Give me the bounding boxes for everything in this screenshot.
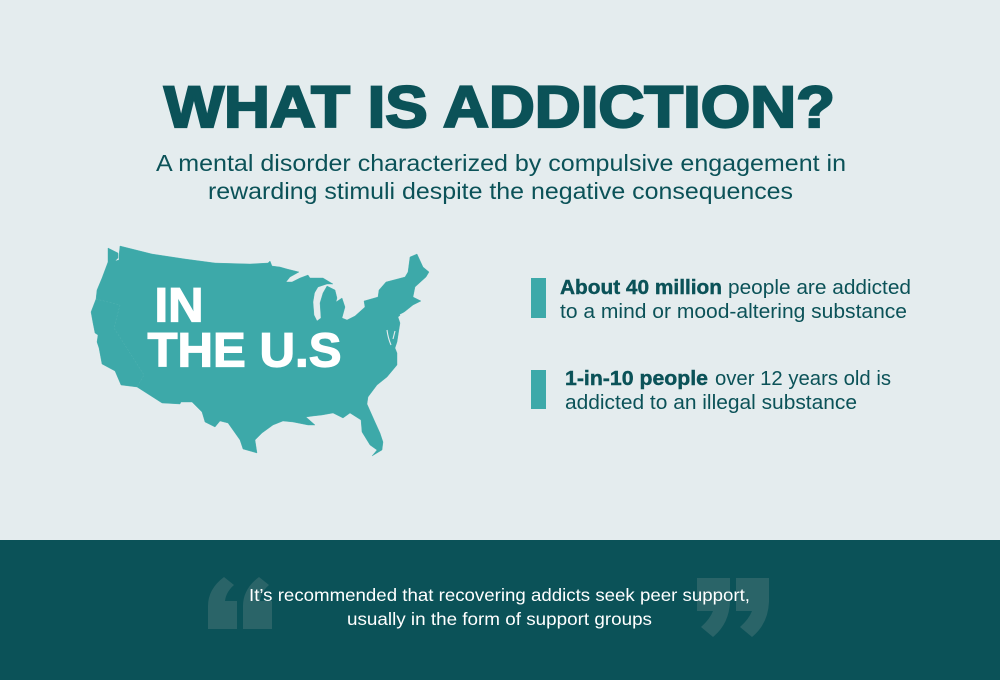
stat text: About 40 million: [560, 277, 722, 299]
subtitle: rewarding stimuli despite the negative consequences: [208, 178, 793, 204]
quote text: usually in the form of support groups: [347, 609, 652, 629]
stat text: over 12 years old is: [715, 368, 891, 390]
coastal inlets: [387, 310, 410, 345]
panel: footer quote: [0, 540, 1000, 680]
quote text: [249, 585, 750, 629]
stat text: addicted to an illegal substance: [565, 392, 857, 414]
stat marker: [531, 370, 546, 409]
stat text: [565, 368, 891, 414]
stat text: 1-in-10 people: [565, 368, 708, 390]
footer background: [0, 540, 1000, 680]
stat text: to a mind or mood-altering substance: [560, 301, 907, 323]
map outline: [91, 246, 429, 456]
subtitle: A mental disorder characterized by compulsive engagement in: [156, 150, 846, 176]
map label: [148, 280, 342, 378]
stat text: [560, 277, 911, 323]
stat text: people are addicted: [728, 277, 911, 299]
quote text: It’s recommended that recovering addicts seek peer support,: [249, 585, 750, 605]
icon: closing quotation mark: [697, 578, 769, 637]
stat: 1-in-10 people: [531, 368, 891, 414]
state borders: [96, 299, 144, 387]
stat: about 40 million: [531, 277, 911, 323]
map label: THE U.S: [148, 324, 342, 378]
stat marker: [531, 278, 546, 318]
map label: IN: [154, 280, 204, 332]
icon: opening quotation mark: [208, 577, 272, 629]
title: WHAT IS ADDICTION?: [164, 75, 835, 140]
map of the United States: [91, 246, 429, 456]
subtitle: [156, 150, 846, 204]
